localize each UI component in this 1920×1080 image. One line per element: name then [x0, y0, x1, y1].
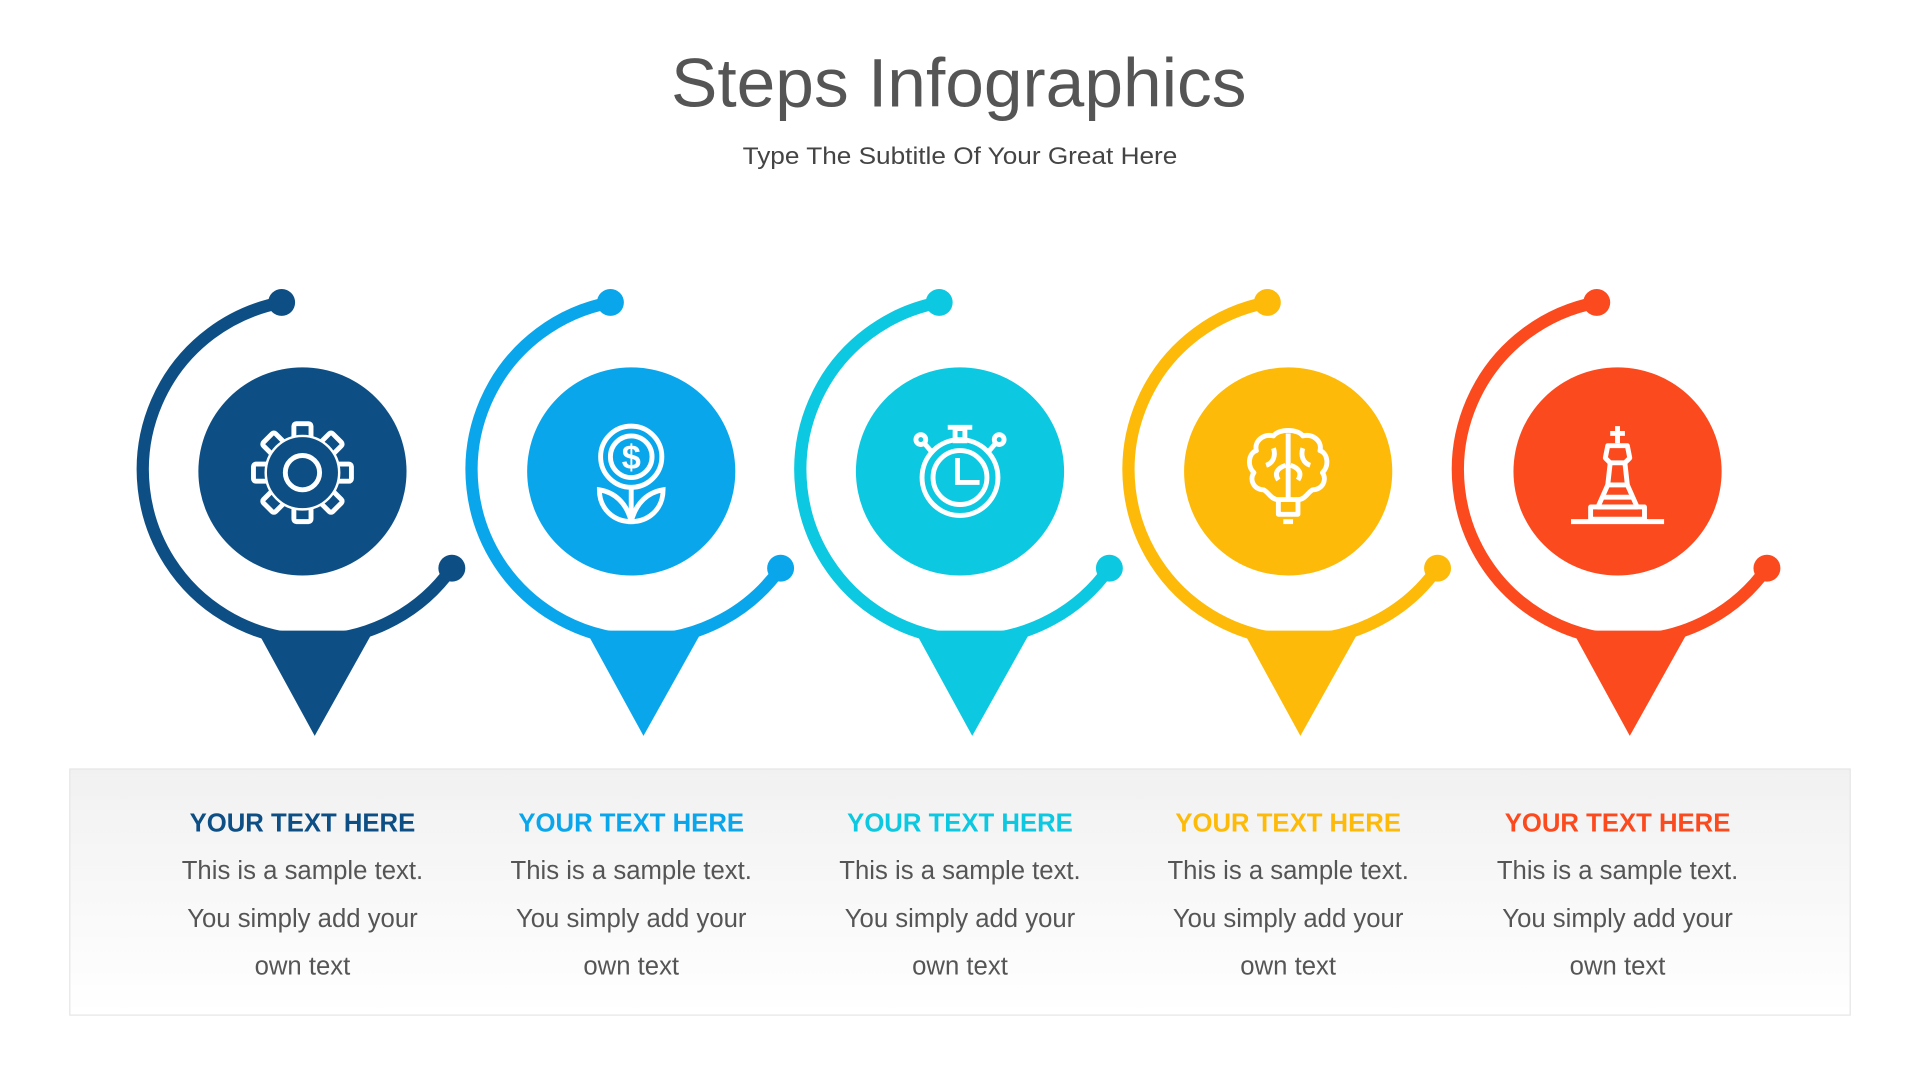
text block 3: YOUR TEXT HERE: [847, 809, 1073, 837]
text block 3: This is a sample text.: [839, 857, 1081, 885]
text block 4: This is a sample text.: [1167, 857, 1409, 885]
panel: text boxes: [70, 769, 1850, 1015]
text block 4: You simply add your: [1173, 905, 1404, 933]
text block 5: You simply add your: [1502, 905, 1733, 933]
pin 5: chess king: [1458, 289, 1780, 736]
text block 2: This is a sample text.: [511, 857, 752, 885]
text block 3: You simply add your: [845, 905, 1076, 933]
pin 3: stopwatch: [800, 289, 1123, 736]
text block 2: YOUR TEXT HERE: [518, 809, 744, 837]
text block 2: own text: [583, 953, 679, 981]
title: Steps Infographics: [671, 45, 1247, 122]
icon: stopwatch: [916, 427, 1004, 516]
icon: dollar flower: [599, 426, 663, 522]
pin 4: brain: [1128, 289, 1451, 736]
icon: gear: [253, 424, 351, 522]
text block 5: This is a sample text.: [1497, 857, 1738, 885]
text block 1: This is a sample text.: [182, 857, 423, 885]
text block 1: You simply add your: [187, 905, 418, 933]
text block 3: own text: [912, 953, 1008, 981]
text block 4: own text: [1240, 953, 1336, 981]
text block 1: [182, 809, 423, 981]
icon: dollar flower: $: [622, 439, 641, 477]
subtitle: Type The Subtitle Of Your Great Here: [743, 143, 1177, 170]
text block 5: own text: [1570, 953, 1665, 981]
pin 1: gear: [143, 289, 465, 736]
text block 4: [1167, 809, 1409, 981]
text block 2: You simply add your: [516, 905, 747, 933]
text block 5: YOUR TEXT HERE: [1505, 809, 1730, 837]
pin 2: money plant: [472, 289, 794, 736]
icon: chess king: [1571, 426, 1664, 522]
text block 4: YOUR TEXT HERE: [1175, 809, 1401, 837]
text block 3: [839, 809, 1081, 981]
text block 2: [511, 809, 752, 981]
text block 5: [1497, 809, 1738, 981]
text block 1: own text: [255, 953, 350, 981]
text block 1: YOUR TEXT HERE: [190, 809, 415, 837]
icon: brain bulb: [1249, 430, 1327, 522]
